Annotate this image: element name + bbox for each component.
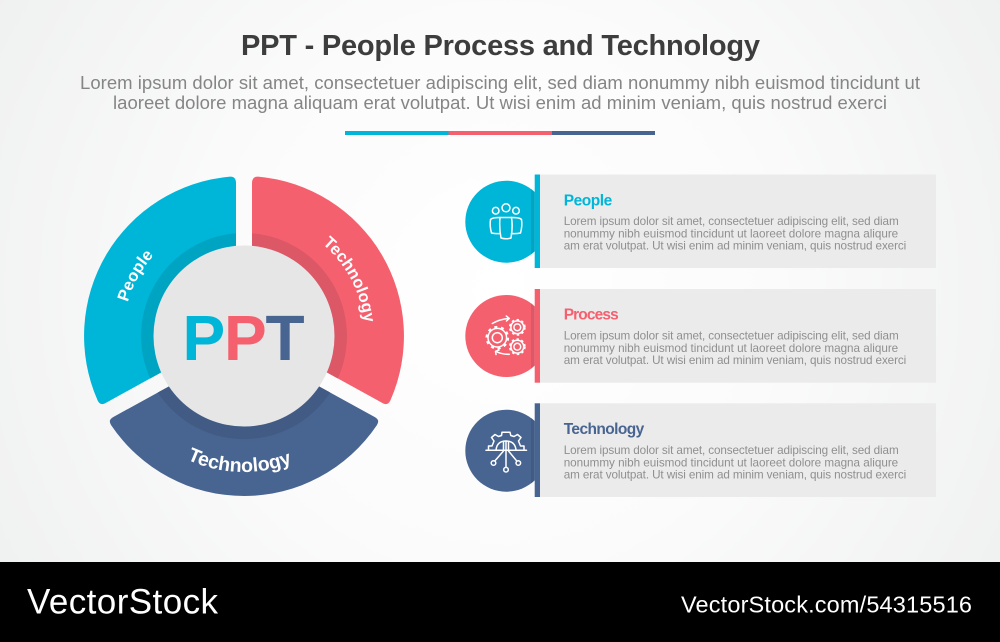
body text: am erat volutpat. Ut wisi enim ad minim veniam, quis nostrud exerci: [564, 354, 906, 367]
icon: gear with circuit: [486, 432, 526, 472]
circular PPT diagram: [84, 176, 404, 496]
title divider: [345, 131, 655, 135]
subtitle text: [80, 72, 920, 113]
circle: [465, 410, 535, 492]
footer brand: VectorStock: [27, 582, 218, 622]
body text: Lorem ipsum dolor sit amet, consectetuer adipiscing elit, sed diam: [564, 215, 899, 228]
heading: Technology: [564, 421, 645, 438]
icon: gears: [487, 316, 525, 354]
heading: Process: [564, 306, 619, 324]
title: PPT - People Process and Technology: [241, 30, 760, 62]
row: People: [465, 170, 936, 270]
icon: people: [490, 204, 522, 239]
accent bar: [535, 174, 540, 268]
circle: [465, 180, 535, 263]
footer image id: VectorStock.com/54315516: [681, 592, 972, 618]
segment label: People: People: [117, 252, 152, 302]
body text: [564, 444, 906, 482]
body text: Lorem ipsum dolor sit amet, consectetuer adipiscing elit, sed diam: [564, 444, 899, 457]
accent bar: [535, 289, 540, 383]
footer bar: [0, 562, 1000, 642]
accent bar: [535, 403, 540, 497]
subtitle text: laoreet dolore magna aliquam erat volutpat. Ut wisi enim ad minim veniam, quis nostrud exerci: [113, 92, 887, 113]
body text: [564, 215, 906, 253]
center PPT letters: P: [182, 302, 225, 374]
body text: nonummy nibh euismod tincidunt ut laoreet dolore magna aliqure: [564, 456, 898, 469]
circle: [465, 295, 535, 377]
center PPT letters: T: [266, 302, 305, 374]
segment: technology (navy): [110, 382, 378, 496]
row: Process: [465, 285, 936, 385]
center circle: [154, 246, 334, 426]
body text: nonummy nibh euismod tincidunt ut laoreet dolore magna aliqure: [564, 342, 898, 355]
segment: people (blue): [84, 177, 236, 404]
heading: People: [564, 192, 613, 210]
body text: am erat volutpat. Ut wisi enim ad minim veniam, quis nostrud exerci: [564, 240, 906, 253]
body text: nonummy nibh euismod tincidunt ut laoreet dolore magna aliqure: [564, 227, 898, 240]
segment: technology (red): [252, 177, 404, 404]
row: Technology: [465, 400, 936, 500]
segment label: Technology (navy): Technology: [191, 447, 289, 472]
body text: [564, 329, 906, 367]
body text: Lorem ipsum dolor sit amet, consectetuer adipiscing elit, sed diam: [564, 329, 899, 342]
subtitle text: Lorem ipsum dolor sit amet, consectetuer adipiscing elit, sed diam nonummy nibh euismod tincidunt ut: [80, 72, 920, 93]
center PPT letters: P: [224, 302, 267, 374]
segment label: Technology (red): Technology: [325, 235, 373, 322]
panel background: [540, 289, 936, 383]
panel background: [540, 403, 936, 497]
panel background: [540, 174, 936, 268]
body text: am erat volutpat. Ut wisi enim ad minim veniam, quis nostrud exerci: [564, 469, 906, 482]
